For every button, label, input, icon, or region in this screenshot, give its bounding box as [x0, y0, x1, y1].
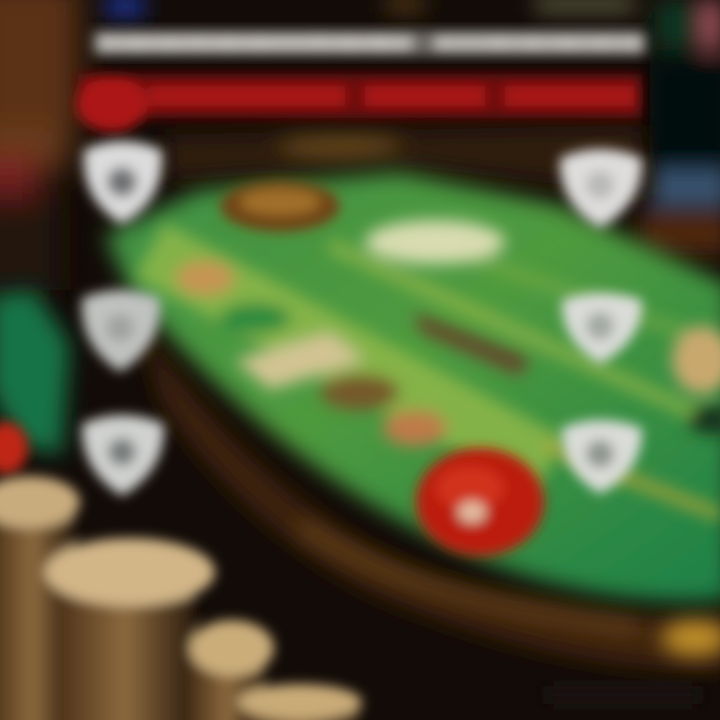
left green felt	[0, 290, 70, 455]
red chip	[416, 448, 544, 556]
table rim back	[165, 125, 650, 195]
red chip left edge	[0, 422, 28, 474]
bowl on table	[220, 180, 340, 232]
icon: shield right 3	[562, 420, 642, 494]
subtitle banner	[76, 74, 642, 132]
felt lines and bets	[150, 220, 720, 515]
table felt	[105, 172, 720, 602]
icon: shield left 3	[82, 415, 164, 496]
icon: shield left 2	[82, 290, 160, 372]
rail highlight	[300, 525, 720, 656]
title banner: Casino Table Games	[98, 33, 638, 53]
background: upper left wood	[0, 0, 80, 290]
icon: shield right 1	[560, 149, 642, 228]
table rail	[140, 325, 720, 671]
icon: shield left 1	[84, 141, 162, 224]
watermark	[548, 686, 698, 704]
stack of chips	[0, 476, 362, 720]
icon: shield right 2	[562, 293, 642, 364]
background: upper right dark area	[105, 0, 720, 255]
